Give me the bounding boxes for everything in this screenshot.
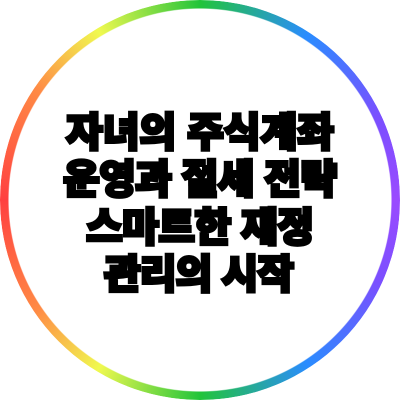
title: 운영과 절세 전략 [63, 158, 337, 202]
title: 자녀의 주식계좌 [66, 111, 334, 155]
title: 스마트한 재정 [86, 206, 314, 250]
title: 관리의 시작 [104, 253, 294, 297]
